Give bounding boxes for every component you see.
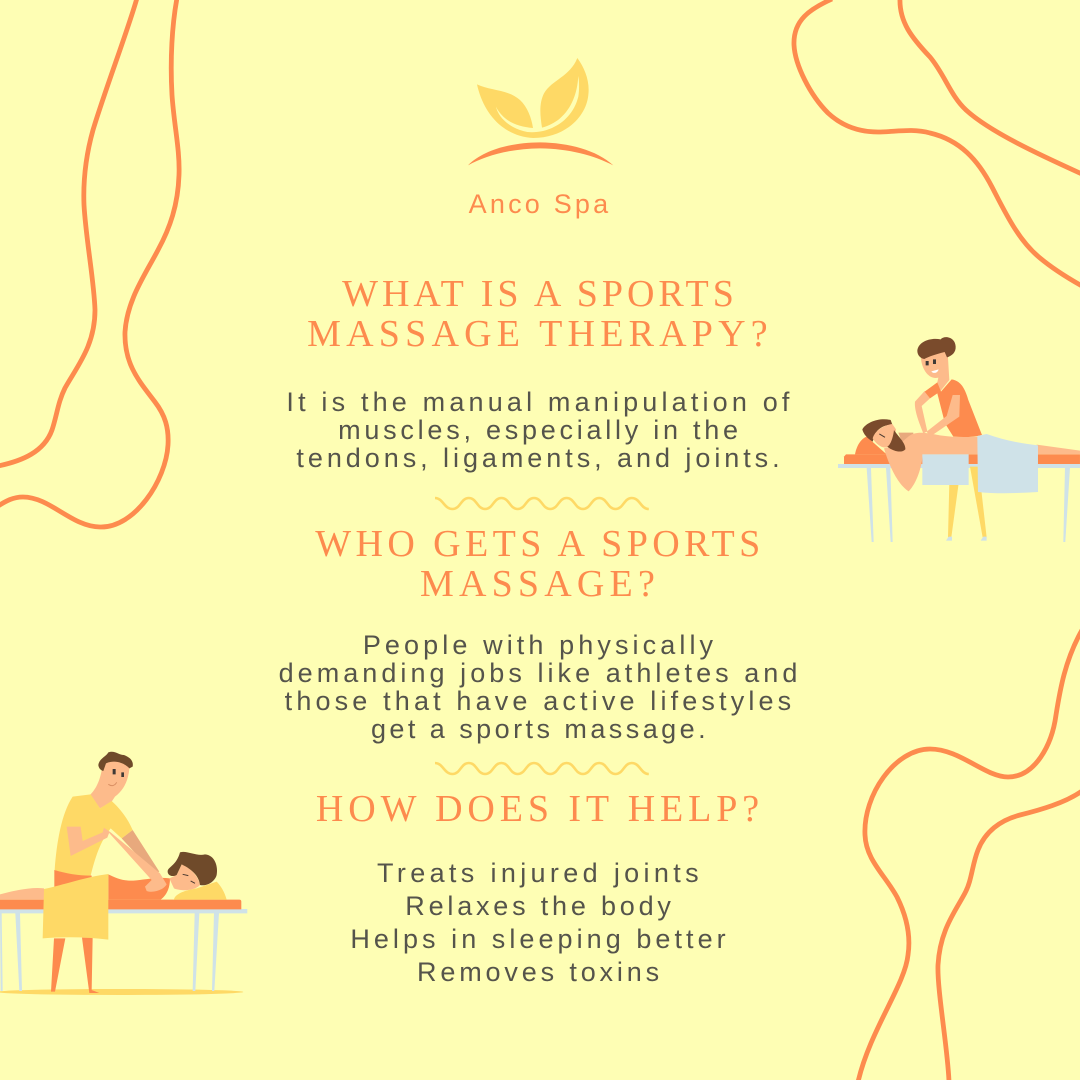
therapist hair xyxy=(917,337,956,359)
therapist legs xyxy=(51,870,99,993)
heading: what is: WHAT IS A SPORTS xyxy=(342,273,738,315)
therapist legs xyxy=(948,467,987,537)
text block: what is xyxy=(286,387,794,473)
woman arm and shoulder xyxy=(105,828,167,892)
table xyxy=(844,454,1080,464)
therapist eyes and smile xyxy=(113,769,124,777)
arc xyxy=(468,142,613,165)
therapist shirt xyxy=(925,379,982,437)
man eye xyxy=(879,434,885,437)
woman eyes xyxy=(183,874,195,883)
text block: what is: It is the manual manipulation of xyxy=(286,387,794,417)
curves: top right xyxy=(794,0,1080,286)
therapist near arm xyxy=(67,827,109,856)
text block: what is: tendons, ligaments, and joints. xyxy=(296,443,784,473)
text block: who gets: People with physically xyxy=(363,630,717,660)
brand name: Anco Spa xyxy=(469,189,611,219)
table xyxy=(0,909,247,991)
man face xyxy=(873,424,896,447)
text block: how: Relaxes the body xyxy=(405,891,675,921)
curves: bottom right xyxy=(858,630,1080,1080)
text block: how: Removes toxins xyxy=(417,957,663,987)
man beard xyxy=(887,430,905,452)
text block: what is: muscles, especially in the xyxy=(338,415,742,445)
therapist near arm xyxy=(927,395,960,436)
illustration: woman massaging man xyxy=(838,337,1080,542)
pillow xyxy=(855,437,887,454)
therapist far arm xyxy=(915,391,930,433)
woman legs xyxy=(0,888,44,900)
towel xyxy=(43,874,108,940)
text block: how: Treats injured joints xyxy=(377,858,703,888)
therapist eyes and smile xyxy=(926,359,936,365)
floor shadow xyxy=(0,989,243,995)
heading: how: HOW DOES IT HELP? xyxy=(316,788,764,830)
woman torso xyxy=(108,874,170,900)
heading: what is xyxy=(307,273,773,355)
towels xyxy=(977,434,1038,493)
heading: who gets xyxy=(315,523,765,605)
leaves xyxy=(477,58,589,138)
therapist neck and face xyxy=(921,347,949,392)
man hair xyxy=(862,419,892,442)
therapist neck and face xyxy=(90,758,130,808)
heading: what is: MASSAGE THERAPY? xyxy=(307,313,773,355)
illustration: man massaging woman xyxy=(0,752,247,995)
man body and arm xyxy=(898,433,913,442)
therapist hair xyxy=(98,752,133,771)
text block: who gets: demanding jobs like athletes and xyxy=(279,658,801,688)
logo: leaves and arc xyxy=(468,58,613,165)
therapist shirt xyxy=(55,794,133,876)
therapist far arm xyxy=(122,830,159,873)
pillow xyxy=(174,882,227,900)
text block: how: Helps in sleeping better xyxy=(350,924,730,954)
woman face and neck xyxy=(169,864,200,890)
text block: who gets xyxy=(279,630,801,744)
text block: who gets: those that have active lifestyles xyxy=(285,686,795,716)
curves: top left xyxy=(0,0,179,527)
heading: who gets: MASSAGE? xyxy=(420,563,660,605)
heading: who gets: WHO GETS A SPORTS xyxy=(315,523,765,565)
wavy divider 1 xyxy=(435,498,649,509)
wavy divider 2 xyxy=(435,763,649,774)
text block: how xyxy=(350,858,730,987)
text block: who gets: get a sports massage. xyxy=(371,714,709,744)
woman hair xyxy=(168,852,217,885)
